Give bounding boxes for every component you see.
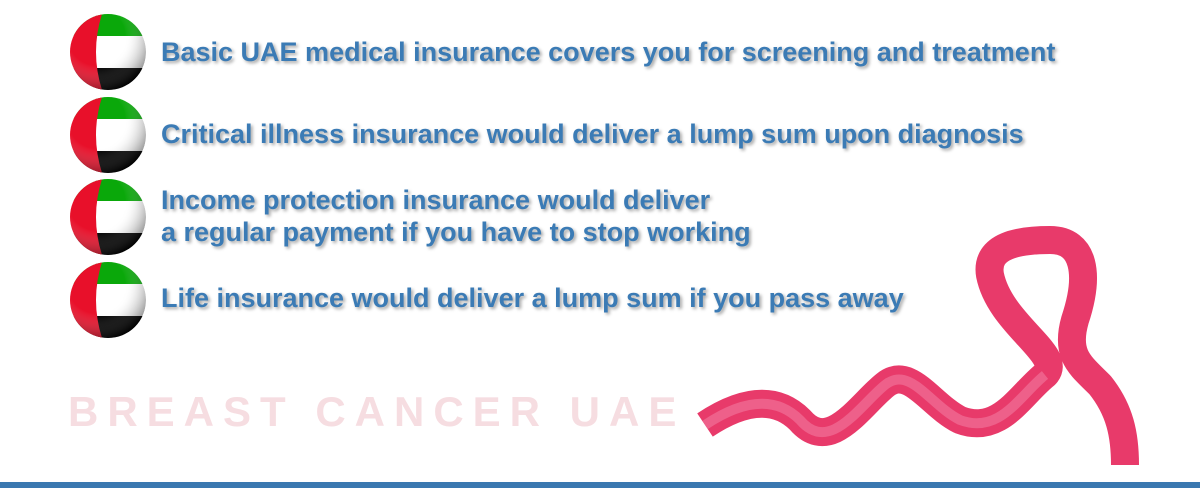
text: item 4: Life insurance would deliver a lump sum if you pass away bbox=[161, 283, 904, 313]
text: item 3 bbox=[161, 185, 753, 250]
icon: flag ball 2 bbox=[70, 97, 146, 173]
text: item 3: a regular payment if you have to stop working bbox=[161, 217, 751, 247]
bottom bar bbox=[0, 482, 1200, 488]
text: item 2: Critical illness insurance would deliver a lump sum upon diagnosis bbox=[161, 119, 1024, 149]
text: item 3: Income protection insurance would deliver bbox=[161, 185, 710, 215]
watermark title: BREAST CANCER UAE bbox=[68, 388, 685, 435]
text: item 1: Basic UAE medical insurance covers you for screening and treatment bbox=[161, 37, 1055, 67]
icon: flag ball 4 bbox=[70, 262, 146, 338]
icon: flag ball 1 bbox=[70, 14, 146, 90]
icon: flag ball 3 bbox=[70, 179, 146, 255]
icon: pink ribbon bbox=[697, 226, 1139, 465]
